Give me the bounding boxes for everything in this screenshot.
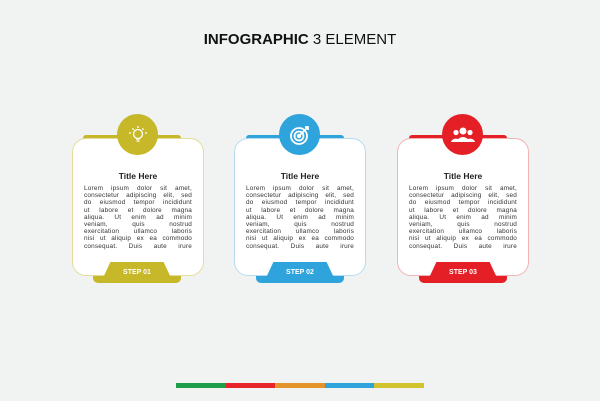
heading: Title Here: [281, 171, 319, 181]
text block: exercitation ullamco laboris: [409, 228, 517, 235]
text block: aliqua. Ut enim ad minim: [409, 214, 517, 221]
text block: [409, 185, 517, 250]
text block: Lorem ipsum dolor sit amet,: [409, 185, 517, 192]
text block: veniam, quis nostrud: [84, 221, 192, 228]
text block: consectetur adipiscing elit, sed: [246, 192, 354, 199]
step label 1: [104, 262, 170, 276]
step label 3: STEP 03: [449, 269, 477, 276]
text block: aliqua. Ut enim ad minim: [246, 214, 354, 221]
text block: veniam, quis nostrud: [246, 221, 354, 228]
text block: exercitation ullamco laboris: [246, 228, 354, 235]
text block: [84, 185, 192, 250]
title: INFOGRAPHIC 3 ELEMENT: [204, 31, 396, 48]
text block: exercitation ullamco laboris: [84, 228, 192, 235]
panel: step 1: [72, 114, 204, 283]
icon: lightbulb: [117, 114, 158, 155]
text block: do eiusmod tempor incididunt: [84, 199, 192, 206]
text block: nisi ut aliquip ex ea commodo: [246, 235, 354, 242]
text block: [246, 185, 354, 250]
text block: Lorem ipsum dolor sit amet,: [246, 185, 354, 192]
text block: veniam, quis nostrud: [409, 221, 517, 228]
text block: do eiusmod tempor incididunt: [409, 199, 517, 206]
panel: step 3: [397, 114, 529, 283]
heading: Title Here: [119, 171, 157, 181]
text block: Lorem ipsum dolor sit amet,: [84, 185, 192, 192]
step label 3: [430, 262, 496, 276]
text block: nisi ut aliquip ex ea commodo: [84, 235, 192, 242]
heading: Title Here: [444, 171, 482, 181]
text block: consectetur adipiscing elit, sed: [84, 192, 192, 199]
text block: ut labore et dolore magna: [84, 207, 192, 214]
text block: nisi ut aliquip ex ea commodo: [409, 235, 517, 242]
step label 1: STEP 01: [123, 269, 151, 276]
text block: consequat. Duis aute irure: [246, 242, 354, 250]
panel: step 2: [234, 114, 366, 283]
icon: target: [279, 114, 320, 155]
text block: do eiusmod tempor incididunt: [246, 199, 354, 206]
color stripe: [176, 383, 424, 388]
icon: people: [442, 114, 483, 155]
step label 2: [266, 262, 334, 276]
text block: ut labore et dolore magna: [409, 207, 517, 214]
step label 2: STEP 02: [286, 269, 314, 276]
text block: consequat. Duis aute irure: [84, 242, 192, 250]
text block: aliqua. Ut enim ad minim: [84, 214, 192, 221]
text block: consectetur adipiscing elit, sed: [409, 192, 517, 199]
text block: ut labore et dolore magna: [246, 207, 354, 214]
text block: consequat. Duis aute irure: [409, 242, 517, 250]
